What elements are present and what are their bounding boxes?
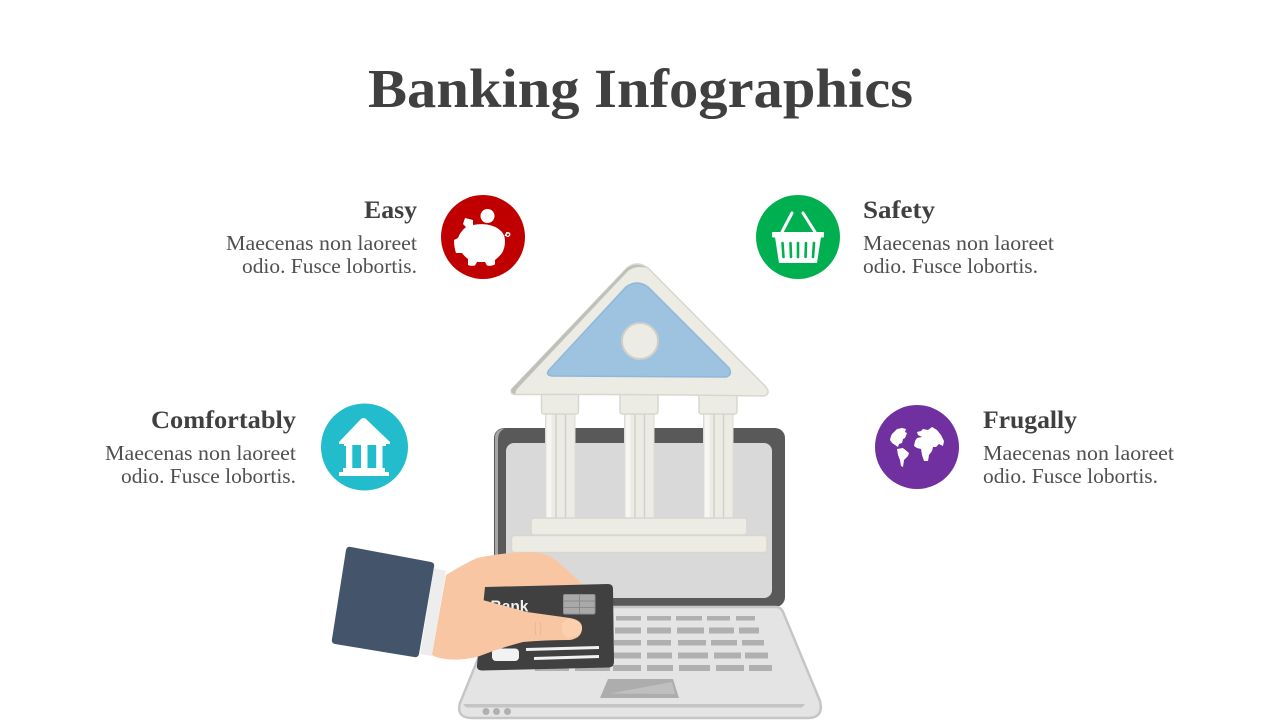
text block: Frugally: Maecenas non laoreet: [983, 441, 1174, 465]
text block: Comfortably: [105, 407, 297, 488]
sleeve: [332, 547, 434, 657]
text block: Frugally: Frugally: [983, 407, 1078, 434]
illustration: laptop, bank and hand with card: [332, 264, 821, 718]
credit card: Bank: [490, 598, 529, 616]
trackpad: [600, 679, 679, 698]
bank building: [511, 264, 768, 552]
text block: Safety: odio. Fusce lobortis.: [863, 254, 1038, 278]
text block: Frugally: odio. Fusce lobortis.: [983, 464, 1158, 488]
hand back: [440, 552, 583, 640]
icon: globe map: [875, 405, 959, 489]
icon: shopping basket: [756, 195, 840, 279]
keyboard: [535, 616, 772, 671]
text block: Comfortably: Maecenas non laoreet: [105, 441, 296, 465]
text block: Comfortably: Comfortably: [151, 407, 297, 434]
pediment medallion: [622, 323, 658, 359]
hand holding card: [332, 547, 614, 670]
roof: [511, 264, 768, 396]
text block: Safety: Maecenas non laoreet: [863, 231, 1054, 255]
text block: Easy: odio. Fusce lobortis.: [242, 254, 417, 278]
text block: Easy: Maecenas non laoreet: [226, 231, 417, 255]
steps: [531, 518, 747, 535]
title: Banking Infographics: [368, 58, 913, 119]
icon: bank building: [321, 404, 408, 490]
pediment: [548, 283, 730, 377]
capitals: [542, 394, 737, 414]
credit card: [477, 584, 614, 670]
columns: [546, 412, 733, 519]
text block: Frugally: [983, 407, 1174, 488]
cuff: [420, 568, 446, 656]
text block: Safety: Safety: [863, 197, 936, 224]
text block: Easy: [226, 197, 418, 278]
thumb and palm: [432, 575, 582, 660]
thumbnail: [562, 619, 582, 638]
text block: Safety: [863, 197, 1054, 278]
laptop base: [459, 607, 821, 718]
text block: Comfortably: odio. Fusce lobortis.: [121, 464, 296, 488]
text block: Easy: Easy: [364, 197, 418, 224]
laptop screen: [494, 428, 785, 607]
icon: piggy bank: [441, 195, 525, 279]
